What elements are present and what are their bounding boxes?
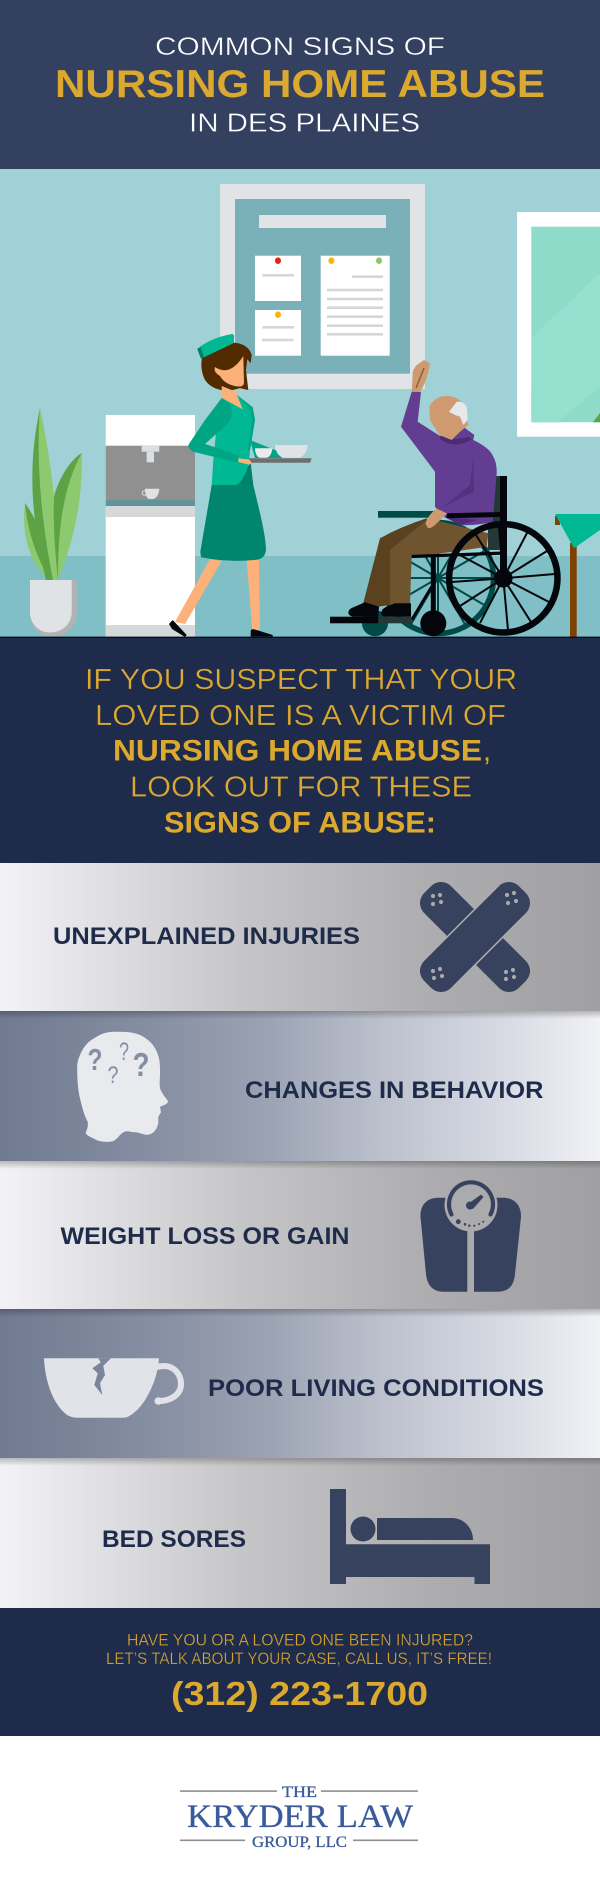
icon: cracked cup xyxy=(44,1358,181,1418)
notice board xyxy=(220,184,425,389)
logo: the kryder law group: THE xyxy=(282,1784,317,1801)
panel: changes in behavior xyxy=(0,1011,600,1161)
icon: head with question marks: ? xyxy=(108,1062,118,1089)
panel: poor living conditions: POOR LIVING CONDITIONS xyxy=(208,1375,544,1402)
icon: head with question marks xyxy=(77,1032,168,1142)
panel: intro text: SIGNS OF ABUSE: xyxy=(164,807,436,840)
logo: the kryder law group: KRYDER LAW xyxy=(187,1799,414,1835)
panel: changes in behavior: CHANGES IN BEHAVIOR xyxy=(245,1077,544,1104)
man raised arm and hoodie xyxy=(401,360,497,525)
man shoes xyxy=(348,602,411,617)
panel: unexplained injuries: UNEXPLAINED INJURIES xyxy=(53,923,360,950)
window xyxy=(517,212,600,437)
panel: weight loss or gain xyxy=(0,1161,600,1309)
water cooler xyxy=(106,415,195,637)
icon: bed xyxy=(330,1489,490,1584)
panel: intro text: LOVED ONE IS A VICTIM OF xyxy=(95,700,506,732)
panel: header xyxy=(0,0,600,169)
panel: intro text: , xyxy=(483,736,491,768)
panel: weight loss or gain: WEIGHT LOSS OR GAIN xyxy=(60,1223,350,1250)
title line: nursing home abuse: NURSING HOME ABUSE xyxy=(55,63,545,106)
title line: common signs of: COMMON SIGNS OF xyxy=(155,33,445,61)
panel: poor living conditions xyxy=(0,1309,600,1458)
panel: call to action: LET’S TALK ABOUT YOUR CASE, CALL US, IT’S FREE! xyxy=(106,1649,492,1668)
panel: intro text: LOOK OUT FOR THESE xyxy=(130,772,472,804)
panel: bed sores: BED SORES xyxy=(102,1526,246,1553)
side table xyxy=(555,514,600,637)
panel: intro text xyxy=(0,638,600,863)
panel: call to action xyxy=(0,1608,600,1736)
panel: intro text: NURSING HOME ABUSE xyxy=(113,735,482,768)
man trousers xyxy=(363,518,488,607)
icon: head with question marks: ? xyxy=(132,1046,150,1083)
icon: head with question marks: ? xyxy=(119,1038,129,1066)
man hand on knee xyxy=(426,508,447,528)
plant xyxy=(24,408,82,636)
panel: nursing home illustration xyxy=(0,169,600,639)
wheelchair and man xyxy=(330,360,558,636)
icon: crossed bandages xyxy=(414,876,536,998)
panel: intro text: IF YOU SUSPECT THAT YOUR xyxy=(85,664,517,696)
icon: head with question marks: ? xyxy=(88,1042,102,1077)
panel: call to action: HAVE YOU OR A LOVED ONE BEEN INJURED? xyxy=(127,1630,473,1650)
wheelchair back wheel xyxy=(449,524,558,632)
panel: bed sores xyxy=(0,1458,600,1608)
nurse xyxy=(169,334,312,637)
icon: weighing scale xyxy=(420,1178,521,1292)
logo: the kryder law group xyxy=(0,1736,600,1895)
title line: in des plaines: IN DES PLAINES xyxy=(189,108,420,138)
panel: call to action: (312) 223-1700 xyxy=(171,1676,428,1713)
logo: the kryder law group: GROUP, LLC xyxy=(252,1834,347,1851)
panel: unexplained injuries xyxy=(0,863,600,1011)
